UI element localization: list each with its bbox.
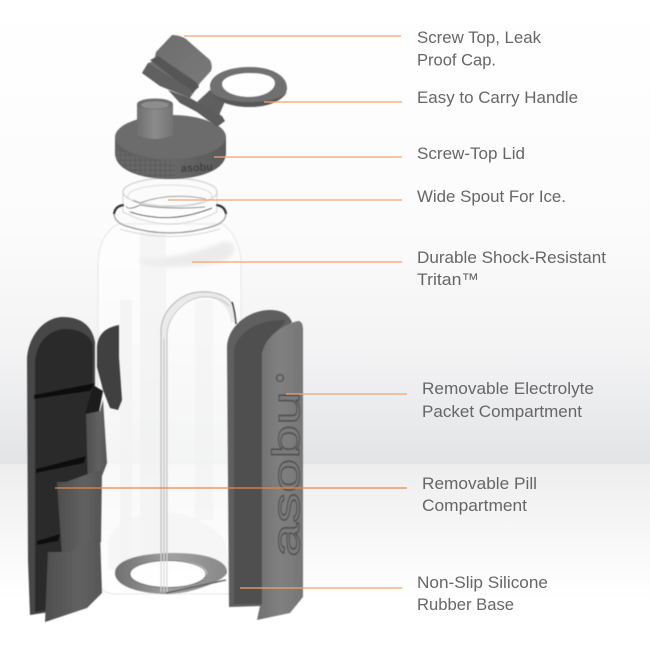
label: base [417, 573, 548, 614]
label: tritan: Tritan™ [417, 270, 479, 289]
clear bottle body [98, 224, 241, 594]
lid top face [115, 115, 226, 159]
cap flange [142, 63, 192, 98]
compartment interior [35, 329, 93, 612]
compartment shell [27, 317, 95, 615]
label: base: Non-Slip Silicone [417, 573, 548, 592]
inner compartment tube [161, 292, 236, 592]
hinge strap [168, 90, 225, 127]
cap neck groove [150, 56, 199, 93]
callout lines [55, 36, 407, 588]
gray pill door lower [45, 533, 102, 622]
right electrolyte compartment [227, 310, 308, 620]
compartment shelves [34, 383, 95, 545]
lid logo: asobu [181, 161, 213, 175]
drinking spout [137, 98, 173, 139]
label: handle: Easy to Carry Handle [417, 88, 578, 107]
embossed logo [266, 374, 308, 557]
embossed logo: asobu [266, 391, 308, 557]
gray pill door middle [57, 470, 102, 556]
label: tritan: Durable Shock-Resistant [417, 248, 606, 267]
label: electrolyte compartment: Packet Compartment [422, 402, 582, 421]
bottle neck and wide spout [114, 178, 226, 236]
front panel [257, 321, 303, 620]
label: electrolyte compartment: Removable Electrolyte [422, 379, 594, 398]
label: spout: Wide Spout For Ice. [417, 187, 566, 206]
label: pill compartment [422, 474, 537, 515]
label: base: Rubber Base [417, 595, 514, 614]
label: electrolyte compartment [422, 379, 594, 421]
lid side band [115, 137, 226, 179]
flap lid [97, 325, 122, 410]
label: lid: Screw-Top Lid [417, 144, 525, 163]
knurled grip [115, 146, 175, 178]
hinged screw top cap [142, 35, 225, 127]
label: screw top [417, 28, 541, 70]
inner back panel [234, 320, 286, 604]
tube base ring [115, 335, 227, 594]
carry handle ring [197, 67, 287, 122]
label: screw top: Proof Cap. [417, 50, 496, 70]
label: screw top: Screw Top, Leak [417, 28, 541, 47]
label: pill compartment: Removable Pill [422, 474, 537, 493]
label: pill compartment: Compartment [422, 496, 527, 515]
outer back shell [227, 310, 292, 607]
cap silhouette [142, 35, 212, 98]
cap lid [115, 98, 226, 179]
gray pill door upper [86, 400, 107, 486]
left pill compartment [27, 317, 122, 622]
label: tritan [417, 248, 606, 289]
flap hinge shadow [85, 385, 103, 414]
